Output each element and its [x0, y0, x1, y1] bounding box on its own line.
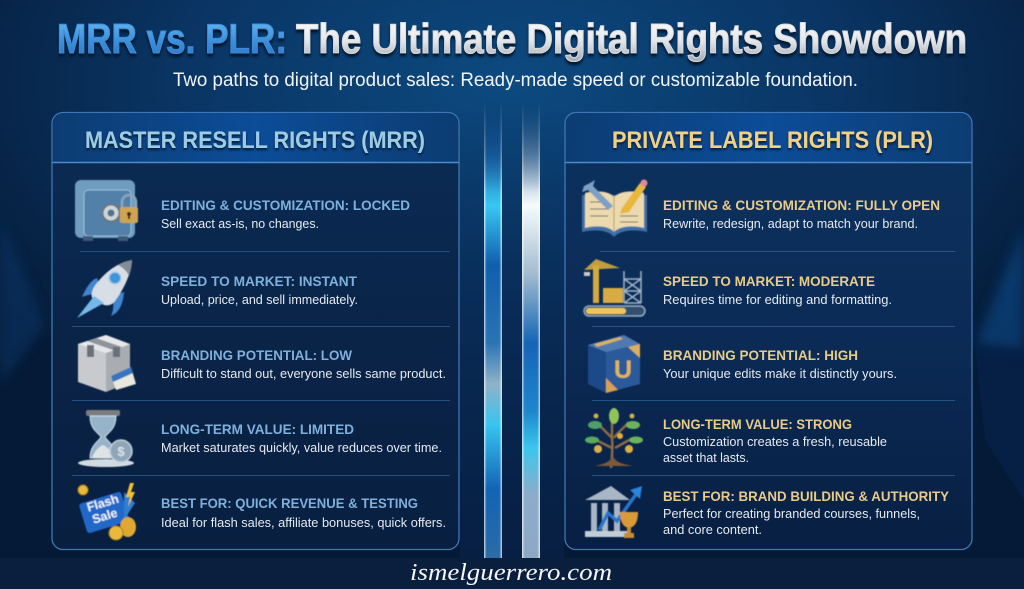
- row: long-term value: LONG-TERM VALUE: STRONG: [663, 416, 852, 432]
- row: long-term value: Customization creates a fresh, reusable: [663, 435, 887, 449]
- row: branding: BRANDING POTENTIAL: HIGH: [663, 347, 858, 363]
- row: editing: EDITING & CUSTOMIZATION: LOCKED: [161, 197, 410, 213]
- row: branding: [161, 347, 446, 381]
- row: long-term value: LONG-TERM VALUE: LIMITED: [161, 421, 354, 437]
- panel header: [566, 113, 972, 162]
- row: editing: EDITING & CUSTOMIZATION: FULLY OPEN: [663, 197, 940, 213]
- row: best for: [161, 495, 446, 530]
- row: branding: Difficult to stand out, everyone sells same product.: [161, 367, 446, 381]
- icon: open book with wrench and pencil: [582, 180, 648, 237]
- panel background: [52, 112, 459, 550]
- panel: PLR: [565, 112, 972, 550]
- row: best for: BEST FOR: QUICK REVENUE & TESTING: [161, 495, 418, 511]
- row: best for: Perfect for creating branded courses, funnels,: [663, 507, 920, 521]
- row: editing: Rewrite, redesign, adapt to match your brand.: [663, 217, 918, 231]
- icon: branded box: [588, 335, 640, 393]
- row: best for: [663, 488, 950, 537]
- panel background: [565, 112, 972, 550]
- subtitle: Two paths to digital product sales: Ready-made speed or customizable foundation.: [173, 70, 858, 91]
- title: [57, 15, 967, 62]
- icon: branded box: U: [614, 356, 632, 384]
- row: speed: SPEED TO MARKET: MODERATE: [663, 273, 875, 289]
- row: speed: Upload, price, and sell immediately.: [161, 293, 358, 307]
- icon: construction crane and progress bar: [584, 259, 645, 316]
- row: long-term value: [161, 421, 442, 455]
- icon: flash sale tag: [78, 483, 136, 540]
- row: best for: and core content.: [663, 523, 762, 537]
- icon: cardboard box: [78, 335, 136, 392]
- row: long-term value: Market saturates quickly, value reduces over time.: [161, 441, 442, 455]
- row: long-term value: [663, 416, 887, 465]
- center pillars: [484, 100, 540, 558]
- icon: bank, growth arrow and trophy: [585, 486, 642, 538]
- row: long-term value: asset that lasts.: [663, 451, 749, 465]
- icon: hourglass with coin: $: [117, 444, 125, 459]
- row: speed: [161, 273, 358, 307]
- row: branding: BRANDING POTENTIAL: LOW: [161, 347, 353, 363]
- icon: rocket: [77, 260, 132, 318]
- icon: hourglass with coin: [78, 410, 134, 467]
- title: MRR vs. PLR:: [57, 15, 287, 62]
- panel header: PRIVATE LABEL RIGHTS (PLR): [612, 127, 933, 154]
- icon: safe with padlock: [75, 180, 138, 241]
- row: branding: [663, 347, 897, 381]
- row: best for: BEST FOR: BRAND BUILDING & AUTHORITY: [663, 488, 950, 504]
- row: best for: Ideal for flash sales, affiliate bonuses, quick offers.: [161, 516, 446, 530]
- panel header: [52, 113, 458, 162]
- row: speed: [663, 273, 892, 307]
- panel: MRR: [52, 112, 459, 550]
- icon: flash sale tag: Sale: [90, 506, 119, 527]
- row: editing: Sell exact as-is, no changes.: [161, 217, 319, 231]
- row: speed: SPEED TO MARKET: INSTANT: [161, 273, 357, 289]
- row: branding: Your unique edits make it distinctly yours.: [663, 367, 897, 381]
- footer band: [0, 558, 1024, 589]
- footer text: ismelguerrero.com: [410, 560, 612, 586]
- row: editing: [161, 197, 410, 231]
- icon: money tree: [585, 408, 643, 468]
- row: speed: Requires time for editing and formatting.: [663, 293, 892, 307]
- panel header: MASTER RESELL RIGHTS (MRR): [85, 127, 425, 154]
- row: editing: [663, 197, 940, 231]
- icon: flash sale tag: Flash: [85, 492, 120, 515]
